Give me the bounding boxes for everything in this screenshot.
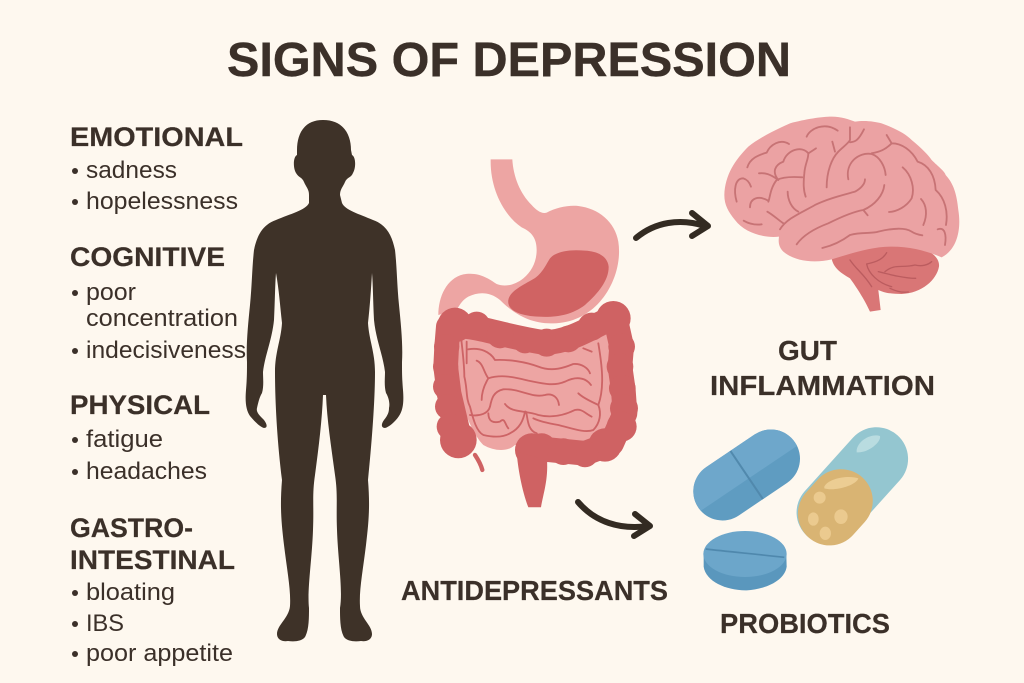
gastro-intestinal section: bloating <box>86 579 175 606</box>
cerebrum <box>724 117 959 261</box>
cognitive section <box>70 242 246 364</box>
cerebellum folds <box>850 253 932 292</box>
cerebellum and brainstem <box>832 246 939 312</box>
arrow: gut to pills <box>578 502 650 536</box>
gastro-intestinal section: IBS <box>86 610 124 637</box>
gastro-intestinal section: poor appetite <box>86 640 233 667</box>
label: antidepressants: ANTIDEPRESSANTS <box>401 575 668 606</box>
cognitive section: poor <box>86 279 136 306</box>
cognitive section: concentration <box>86 305 238 332</box>
gastro-intestinal section: GASTRO- <box>70 513 193 543</box>
cognitive section: indecisiveness <box>86 337 246 364</box>
colon <box>433 301 638 507</box>
small intestine backing <box>457 333 615 450</box>
gastro-intestinal section: INTESTINAL <box>70 545 235 575</box>
emotional section <box>70 122 243 215</box>
label: gut inflammation: INFLAMMATION <box>710 370 935 401</box>
gastro-intestinal section <box>70 513 235 667</box>
physical section: fatigue <box>86 426 163 453</box>
physical section: headaches <box>86 458 207 485</box>
two-tone capsule <box>784 414 921 558</box>
appendix <box>475 455 482 470</box>
brain folds <box>735 126 947 248</box>
cognitive section: COGNITIVE <box>70 242 225 272</box>
icon: brain <box>724 117 959 312</box>
emotional section: hopelessness <box>86 188 238 215</box>
physical section: PHYSICAL <box>70 390 210 420</box>
icon: human body silhouette <box>246 120 403 641</box>
round tablet <box>703 531 787 590</box>
label: gut inflammation <box>710 335 935 401</box>
title: SIGNS OF DEPRESSION <box>227 34 791 87</box>
emotional section: sadness <box>86 157 177 184</box>
panel: symptom list <box>70 122 246 667</box>
stomach <box>438 159 619 323</box>
icon: pills <box>693 427 908 590</box>
physical section <box>70 390 210 485</box>
arrow: gut to brain <box>636 213 708 238</box>
emotional section: EMOTIONAL <box>70 122 243 152</box>
blue capsule tablet <box>693 430 800 520</box>
stomach contents <box>508 250 609 317</box>
label: probiotics: PROBIOTICS <box>720 608 890 639</box>
label: gut inflammation: GUT <box>778 335 837 366</box>
small intestine loops <box>461 337 602 440</box>
icon: digestive system <box>433 159 638 507</box>
